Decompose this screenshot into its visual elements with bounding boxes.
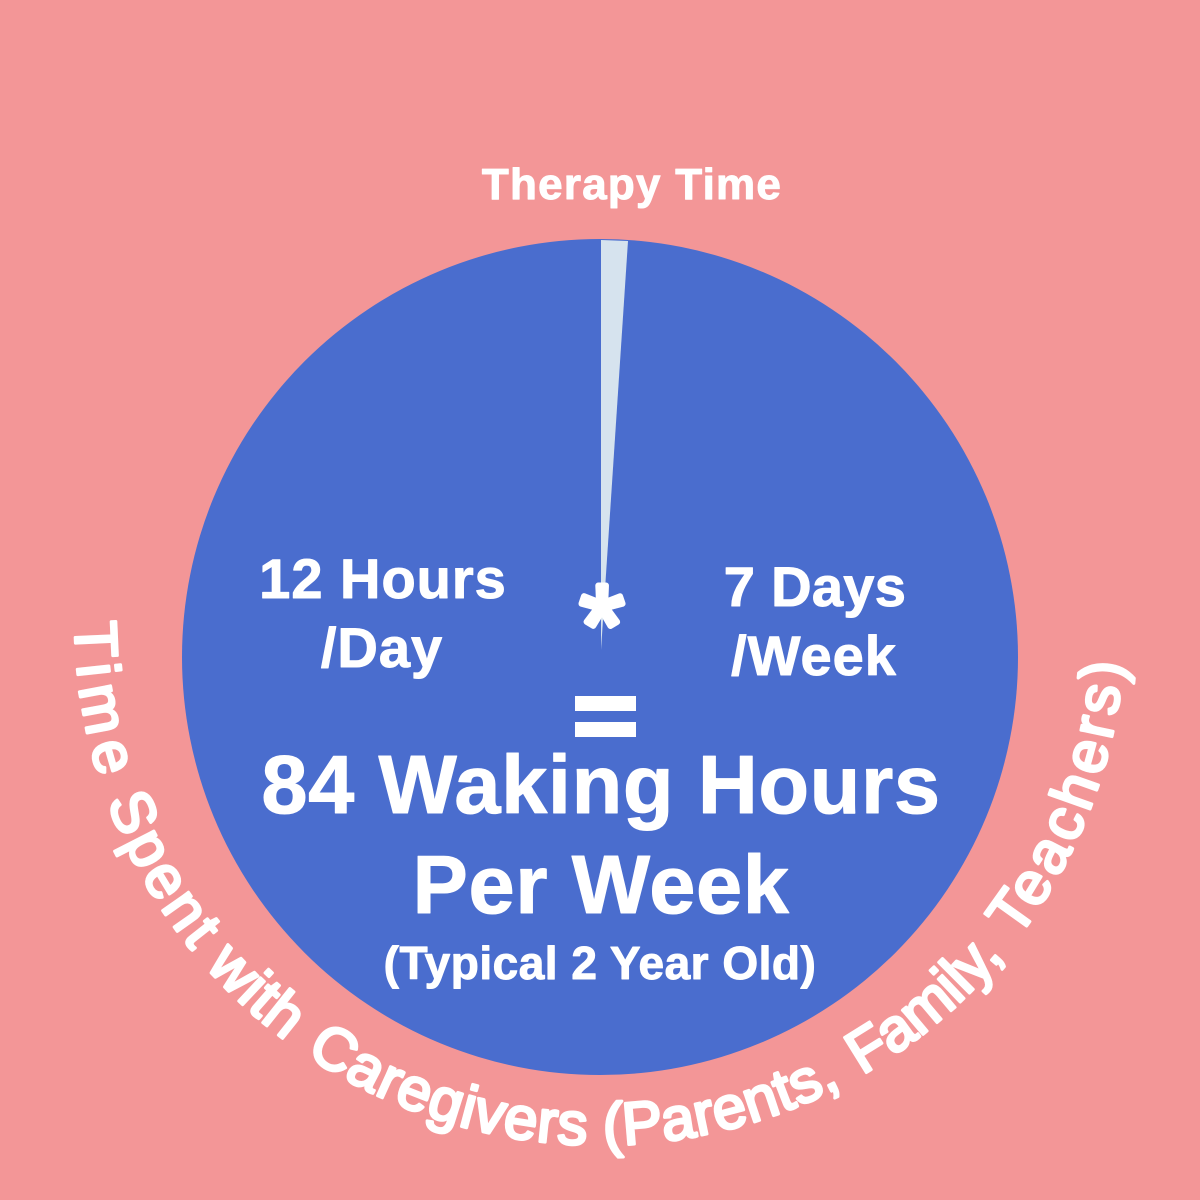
headline: 84 waking hours per week <box>261 738 941 931</box>
label: 12 hours per day <box>259 547 507 679</box>
label: 12 hours per day: 12 Hours <box>259 547 507 610</box>
pie chart <box>182 239 1018 1075</box>
curved label: time spent with caregivers: TimeSpentwithCaregivers(Parents,Family,Teachers) <box>74 620 1136 1159</box>
therapy time slice <box>601 240 628 650</box>
note: typical 2 year old: (Typical 2 Year Old) <box>384 937 816 989</box>
label: therapy time: Therapy Time <box>482 160 782 209</box>
label: 12 hours per day: /Day <box>321 616 443 679</box>
headline: 84 waking hours per week: Per Week <box>412 838 790 931</box>
multiplication sign: * <box>580 562 624 690</box>
label: 7 days per week: /Week <box>731 624 897 687</box>
headline: 84 waking hours per week: 84 Waking Hours <box>261 738 941 831</box>
label: 7 days per week <box>724 555 906 687</box>
label: 7 days per week: 7 Days <box>724 555 906 618</box>
equals sign <box>575 696 636 737</box>
caregiver time slice <box>182 239 1018 1075</box>
